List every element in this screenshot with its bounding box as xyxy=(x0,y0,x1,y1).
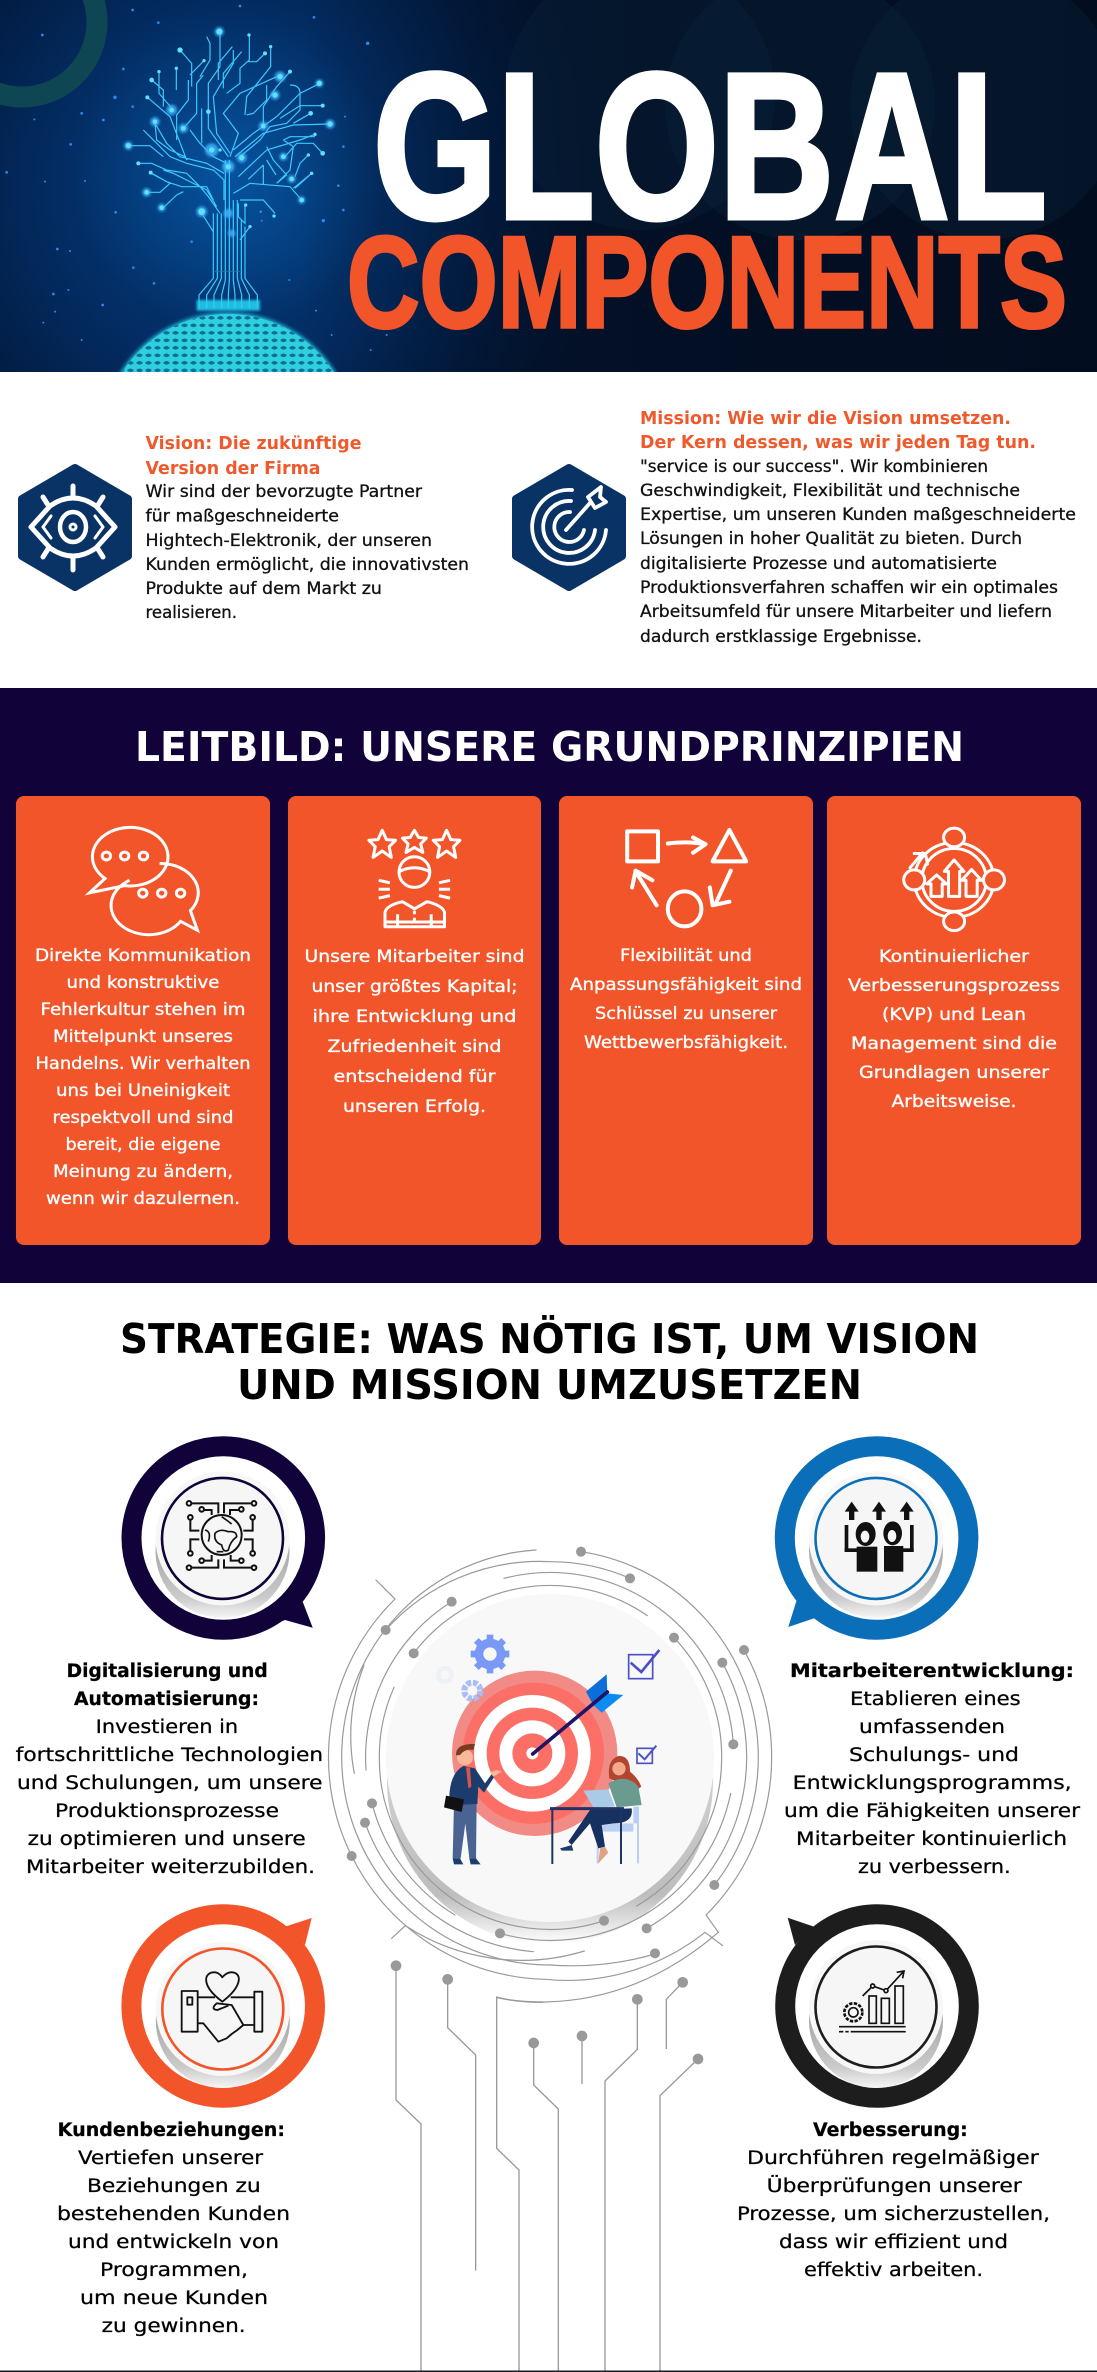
icon: improvement cycle xyxy=(904,828,1004,931)
text: mitarbeiterentwicklung: Mitarbeiter kontinuierlich xyxy=(796,1829,1067,1850)
text: improvement: Arbeitsweise. xyxy=(892,1092,1016,1111)
figure: man xyxy=(444,1744,502,1864)
bubble: navy xyxy=(132,1446,315,1630)
header banner xyxy=(0,0,1097,372)
text: verbesserung: effektiv arbeiten. xyxy=(804,2260,983,2281)
circuit lines bottom xyxy=(391,1960,703,2371)
icon: chart with gear xyxy=(839,1971,906,2032)
text: communication: respektvoll und sind xyxy=(52,1108,234,1127)
icon: arrow xyxy=(533,1674,623,1754)
text: kundenbeziehungen: bestehenden Kunden xyxy=(57,2204,290,2225)
card 2: employees xyxy=(288,796,541,1245)
text: mitarbeiterentwicklung: um die Fähigkeiten unserer xyxy=(784,1801,1080,1822)
text: employees: unseren Erfolg. xyxy=(343,1097,486,1116)
icon: handshake with heart xyxy=(182,1972,262,2042)
text: vision body: für maßgeschneiderte xyxy=(146,506,339,526)
text: kundenbeziehungen: um neue Kunden xyxy=(80,2288,268,2309)
text: digitalisierung xyxy=(16,1661,323,1878)
text: verbesserung: Überprüfungen unserer xyxy=(767,2175,1022,2197)
heading: strategie: STRATEGIE: WAS NÖTIG IST, UM VISION xyxy=(120,1315,979,1363)
text: improvement: Kontinuierlicher xyxy=(879,947,1029,966)
icon: people with arrows xyxy=(845,1502,914,1572)
heading: mission: Der Kern dessen, was wir jeden Tag tun. xyxy=(640,433,1036,453)
card 1: communication xyxy=(16,796,270,1245)
text: mitarbeiterentwicklung: zu verbessern. xyxy=(858,1857,1011,1878)
text: employees: ihre Entwicklung und xyxy=(312,1007,516,1026)
icon: digital globe xyxy=(187,1501,256,1570)
bubble: blue xyxy=(785,1446,968,1630)
card 4: improvement xyxy=(827,796,1081,1245)
panel: vision xyxy=(22,434,469,622)
text: digitalisierung: zu optimieren und unsere xyxy=(28,1829,306,1850)
text: mission body: dadurch erstklassige Ergebnisse. xyxy=(640,627,922,646)
heading: mission xyxy=(640,409,1036,453)
text: verbesserung: Durchführen regelmäßiger xyxy=(747,2148,1039,2169)
stars xyxy=(5,5,388,351)
text: improvement: Management sind die xyxy=(851,1034,1057,1053)
text: communication: Mittelpunkt unseres xyxy=(53,1027,233,1046)
strategy 2: mitarbeiterentwicklung xyxy=(784,1446,1080,1878)
circuit rings xyxy=(328,1547,772,2002)
text: vision body: Wir sind der bevorzugte Partner xyxy=(146,482,422,501)
icon: target hexagon xyxy=(516,468,622,587)
card 3: flexibility xyxy=(559,796,813,1245)
decorative ring xyxy=(0,0,97,97)
illustration: target, arrow and people xyxy=(438,1635,659,1864)
text: kundenbeziehungen xyxy=(57,2120,290,2337)
heading: strategie xyxy=(120,1315,979,1409)
text: employees: Unsere Mitarbeiter sind xyxy=(304,947,524,966)
heading: vision: Version der Firma xyxy=(146,459,320,479)
text: improvement: Verbesserungsprozess xyxy=(848,976,1060,995)
circuit tree xyxy=(100,25,359,372)
text: communication: Fehlerkultur stehen im xyxy=(40,1000,245,1019)
icon: bullseye xyxy=(452,1671,617,1836)
text: employees: entscheidend für xyxy=(334,1067,496,1086)
text: mitarbeiterentwicklung: Mitarbeiterentwicklung: xyxy=(790,1661,1074,1682)
text: flexibility: Schlüssel zu unserer xyxy=(595,1004,777,1023)
text: digitalisierung: Mitarbeiter weiterzubilden. xyxy=(26,1857,315,1878)
text: flexibility: Wettbewerbsfähigkeit. xyxy=(584,1033,788,1052)
text: mission body: Expertise, um unseren Kunden maßgeschneiderte xyxy=(640,505,1076,524)
text: employees: Zufriedenheit sind xyxy=(328,1037,502,1056)
text: kundenbeziehungen: Kundenbeziehungen: xyxy=(58,2120,285,2141)
globe xyxy=(118,310,338,372)
central target graphic xyxy=(328,1547,772,2002)
text: verbesserung xyxy=(737,2120,1050,2281)
text: vision body: realisieren. xyxy=(146,603,237,622)
heading: leitbild: LEITBILD: UNSERE GRUNDPRINZIPIEN xyxy=(135,723,964,771)
text: mission body: "service is our success". Wir kombinieren xyxy=(640,457,988,476)
text: mitarbeiterentwicklung xyxy=(784,1661,1080,1878)
text: communication: Meinung zu ändern, xyxy=(53,1162,233,1181)
text: vision body: Produkte auf dem Markt zu xyxy=(146,579,382,598)
text: improvement xyxy=(848,947,1060,1111)
text: employees: unser größtes Kapital; xyxy=(312,977,518,996)
text: communication: wenn wir dazulernen. xyxy=(46,1189,240,1208)
text: kundenbeziehungen: zu gewinnen. xyxy=(102,2316,246,2337)
text: verbesserung: Prozesse, um sicherzustellen, xyxy=(737,2204,1050,2225)
text: improvement: Grundlagen unserer xyxy=(859,1063,1049,1082)
text: digitalisierung: und Schulungen, um unsere xyxy=(17,1773,322,1794)
text: mission body: Arbeitsumfeld für unsere Mitarbeiter und liefern xyxy=(640,602,1052,621)
text: mitarbeiterentwicklung: Schulungs- und xyxy=(849,1745,1019,1766)
text: communication: und konstruktive xyxy=(66,973,220,992)
text: mission body: Lösungen in hoher Qualität zu bieten. Durch xyxy=(640,529,1022,548)
text: digitalisierung: Produktionsprozesse xyxy=(55,1801,279,1822)
figure: woman at desk xyxy=(550,1756,642,1864)
icon: gears xyxy=(438,1635,509,1682)
icon: star employee xyxy=(369,830,460,927)
text: mission body: Produktionsverfahren schaffen wir ein optimales xyxy=(640,578,1058,597)
text: vision body: Hightech-Elektronik, der unseren xyxy=(146,531,432,550)
text: digitalisierung: Digitalisierung und xyxy=(67,1661,268,1682)
text: flexibility: Flexibilität und xyxy=(620,946,752,965)
text: mitarbeiterentwicklung: umfassenden xyxy=(859,1717,1005,1738)
text: kundenbeziehungen: Programmen, xyxy=(100,2260,248,2281)
text: vision body xyxy=(146,482,469,622)
heading: vision: Vision: Die zukünftige xyxy=(146,434,362,454)
text: kundenbeziehungen: und entwickeln von xyxy=(68,2232,279,2253)
text: mission body: digitalisierte Prozesse und automatisierte xyxy=(640,554,997,573)
text: vision body: Kunden ermöglicht, die innovativsten xyxy=(146,555,469,574)
heading: vision xyxy=(146,434,362,479)
text: communication: Handelns. Wir verhalten xyxy=(36,1054,250,1073)
text: communication xyxy=(35,946,251,1208)
text: mitarbeiterentwicklung: Etablieren eines xyxy=(850,1689,1021,1710)
text: improvement: (KVP) und Lean xyxy=(882,1005,1026,1024)
heading: mission: Mission: Wie wir die Vision umsetzen. xyxy=(640,409,1011,429)
text: digitalisierung: fortschrittliche Technologien xyxy=(16,1745,323,1766)
text: mission body xyxy=(640,457,1076,646)
text: communication: Direkte Kommunikation xyxy=(35,946,251,965)
text: employees xyxy=(304,947,524,1116)
text: flexibility: Anpassungsfähigkeit sind xyxy=(570,975,802,994)
bubble: orange xyxy=(131,1914,315,2098)
text: communication: uns bei Uneinigkeit xyxy=(56,1081,231,1100)
icon: shapes cycle xyxy=(627,830,746,926)
text: flexibility xyxy=(570,946,802,1052)
icon: chat bubbles xyxy=(90,827,198,935)
icon: checkboxes xyxy=(629,1650,659,1763)
text: digitalisierung: Automatisierung: xyxy=(74,1689,259,1710)
text: digitalisierung: Investieren in xyxy=(96,1717,238,1738)
strategy 1: digitalisierung xyxy=(16,1446,323,1878)
strategy 4: verbesserung xyxy=(737,1914,1050,2281)
disc with shadow xyxy=(386,1594,714,1944)
heading: strategie: UND MISSION UMZUSETZEN xyxy=(237,1361,862,1409)
panel: leitbild xyxy=(0,688,1097,1283)
bubble: black xyxy=(785,1914,969,2098)
icon: eye hexagon xyxy=(22,468,128,587)
strategy 3: kundenbeziehungen xyxy=(57,1914,315,2337)
panel: mission xyxy=(516,409,1076,646)
text: kundenbeziehungen: Beziehungen zu xyxy=(87,2176,261,2197)
text: verbesserung: dass wir effizient und xyxy=(779,2232,1008,2253)
text: kundenbeziehungen: Vertiefen unserer xyxy=(78,2148,263,2169)
text: mission body: Geschwindigkeit, Flexibilität und technische xyxy=(640,481,1020,500)
text: verbesserung: Verbesserung: xyxy=(813,2120,968,2141)
text: communication: bereit, die eigene xyxy=(66,1135,220,1154)
text: mitarbeiterentwicklung: Entwicklungsprogramms, xyxy=(793,1773,1072,1794)
